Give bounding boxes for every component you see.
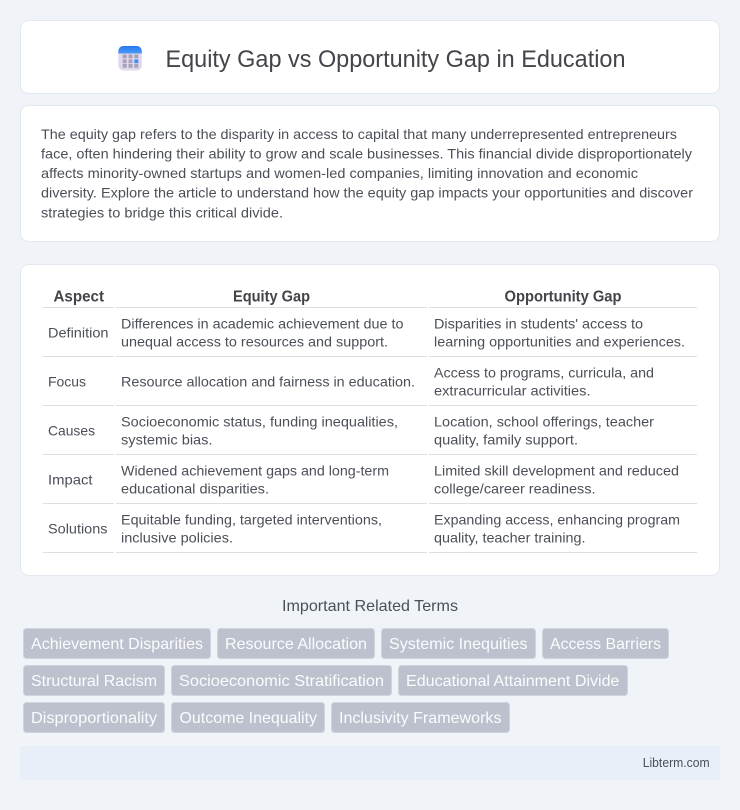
table row: focus bbox=[43, 364, 697, 406]
table row: impact bbox=[43, 462, 697, 504]
table row: impact: college/career readiness. bbox=[434, 480, 596, 496]
table row: definition: Disparities in students' access to bbox=[434, 316, 643, 332]
text block: introduction paragraph: face, often hindering their ability to grow and scale businesses. This financial divide disproportionately bbox=[41, 146, 692, 162]
tag: structural racism: Structural Racism bbox=[31, 673, 157, 690]
footer credit: Libterm.com bbox=[643, 756, 710, 770]
table row: causes bbox=[43, 414, 697, 455]
text block: introduction paragraph bbox=[41, 126, 693, 220]
tag: educational attainment divide: Educational Attainment Divide bbox=[406, 673, 620, 690]
icon: calendar bbox=[118, 46, 142, 70]
table row: definition bbox=[43, 316, 697, 357]
tag: resource allocation: Resource Allocation bbox=[225, 636, 367, 653]
tag: achievement disparities: Achievement Disparities bbox=[31, 636, 203, 653]
table row: solutions: Expanding access, enhancing program bbox=[434, 512, 680, 528]
table header row: Equity Gap bbox=[233, 288, 310, 306]
tag: disproportionality bbox=[24, 702, 164, 732]
table row: impact: educational disparities. bbox=[121, 480, 269, 496]
text block: introduction paragraph: diversity. Explore the article to understand how the equity gap impacts your opportunities and discover bbox=[41, 185, 693, 201]
table row: impact: Impact bbox=[48, 472, 93, 488]
table row: focus: Resource allocation and fairness in education. bbox=[121, 374, 415, 390]
tag: access barriers bbox=[542, 628, 668, 658]
table row: definition: Definition bbox=[48, 324, 108, 340]
tag: outcome inequality bbox=[172, 702, 324, 732]
panel: introduction bbox=[20, 106, 720, 242]
tag: structural racism bbox=[24, 666, 164, 696]
tag: systemic inequities bbox=[382, 628, 536, 658]
tag: educational attainment divide bbox=[398, 666, 628, 696]
table row: solutions: inclusive policies. bbox=[121, 530, 233, 546]
tag: inclusivity frameworks: Inclusivity Frameworks bbox=[339, 710, 502, 727]
table row: solutions: quality, teacher training. bbox=[434, 530, 586, 546]
table header row: Aspect bbox=[54, 288, 104, 306]
tag: access barriers: Access Barriers bbox=[550, 636, 661, 653]
table row: impact: Limited skill development and reduced bbox=[434, 462, 679, 478]
tag: achievement disparities bbox=[24, 628, 210, 658]
tag: socioeconomic stratification bbox=[172, 666, 392, 696]
table row: causes: Causes bbox=[48, 422, 95, 438]
table row: definition: learning opportunities and experiences. bbox=[434, 334, 685, 350]
heading: important related terms: Important Related Terms bbox=[282, 598, 458, 615]
table row: impact: Widened achievement gaps and long-term bbox=[121, 462, 389, 478]
tag: disproportionality: Disproportionality bbox=[31, 710, 157, 727]
table row: focus: Access to programs, curricula, and bbox=[434, 364, 654, 380]
table row: focus: Focus bbox=[48, 374, 86, 390]
table header row: Opportunity Gap bbox=[504, 288, 622, 306]
table row: causes: Location, school offerings, teacher bbox=[434, 414, 654, 430]
table row: definition: Differences in academic achievement due to bbox=[121, 316, 404, 332]
tag: socioeconomic stratification: Socioeconomic Stratification bbox=[179, 673, 384, 690]
text block: introduction paragraph: strategies to bridge this critical divide. bbox=[41, 204, 283, 220]
table row: causes: systemic bias. bbox=[121, 432, 212, 448]
tag: resource allocation bbox=[218, 628, 374, 658]
table row: solutions bbox=[43, 512, 697, 553]
table row: causes: Socioeconomic status, funding inequalities, bbox=[121, 414, 398, 430]
table header row bbox=[43, 288, 697, 308]
text block: introduction paragraph: The equity gap refers to the disparity in access to capital that many underrepresented entrepreneurs bbox=[41, 126, 677, 142]
tag: systemic inequities: Systemic Inequities bbox=[389, 636, 528, 653]
tag: inclusivity frameworks bbox=[332, 702, 510, 732]
panel: title card bbox=[20, 20, 720, 94]
tag: outcome inequality: Outcome Inequality bbox=[180, 710, 317, 727]
table row: solutions: Equitable funding, targeted interventions, bbox=[121, 512, 382, 528]
table row: focus: extracurricular activities. bbox=[434, 382, 590, 398]
title: Equity Gap vs Opportunity Gap in Education bbox=[166, 46, 626, 73]
text block: introduction paragraph: affects minority-owned startups and women-led companies, limiting innovation and economic bbox=[41, 165, 638, 181]
footer bbox=[20, 746, 720, 780]
table row: solutions: Solutions bbox=[48, 520, 108, 536]
table row: definition: unequal access to resources and support. bbox=[121, 334, 388, 350]
panel: comparison table bbox=[20, 264, 720, 576]
table row: causes: quality, family support. bbox=[434, 432, 578, 448]
panel: related term tags bbox=[24, 628, 668, 732]
